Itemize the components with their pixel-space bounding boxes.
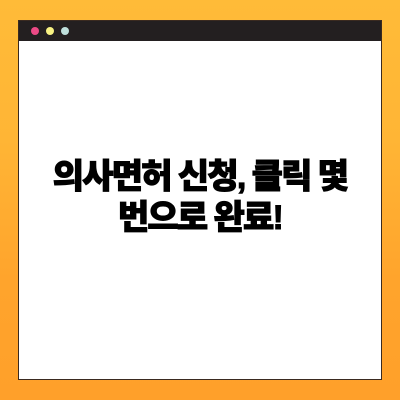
- title: 의사면허 신청, 클릭 몇: [53, 158, 347, 196]
- icon: pink dot: [31, 27, 39, 35]
- title: 번으로 완료!: [118, 199, 282, 237]
- window title bar: [19, 21, 381, 41]
- icon: pale blue dot: [61, 27, 69, 35]
- icon: yellow dot: [46, 27, 54, 35]
- title: [53, 158, 348, 237]
